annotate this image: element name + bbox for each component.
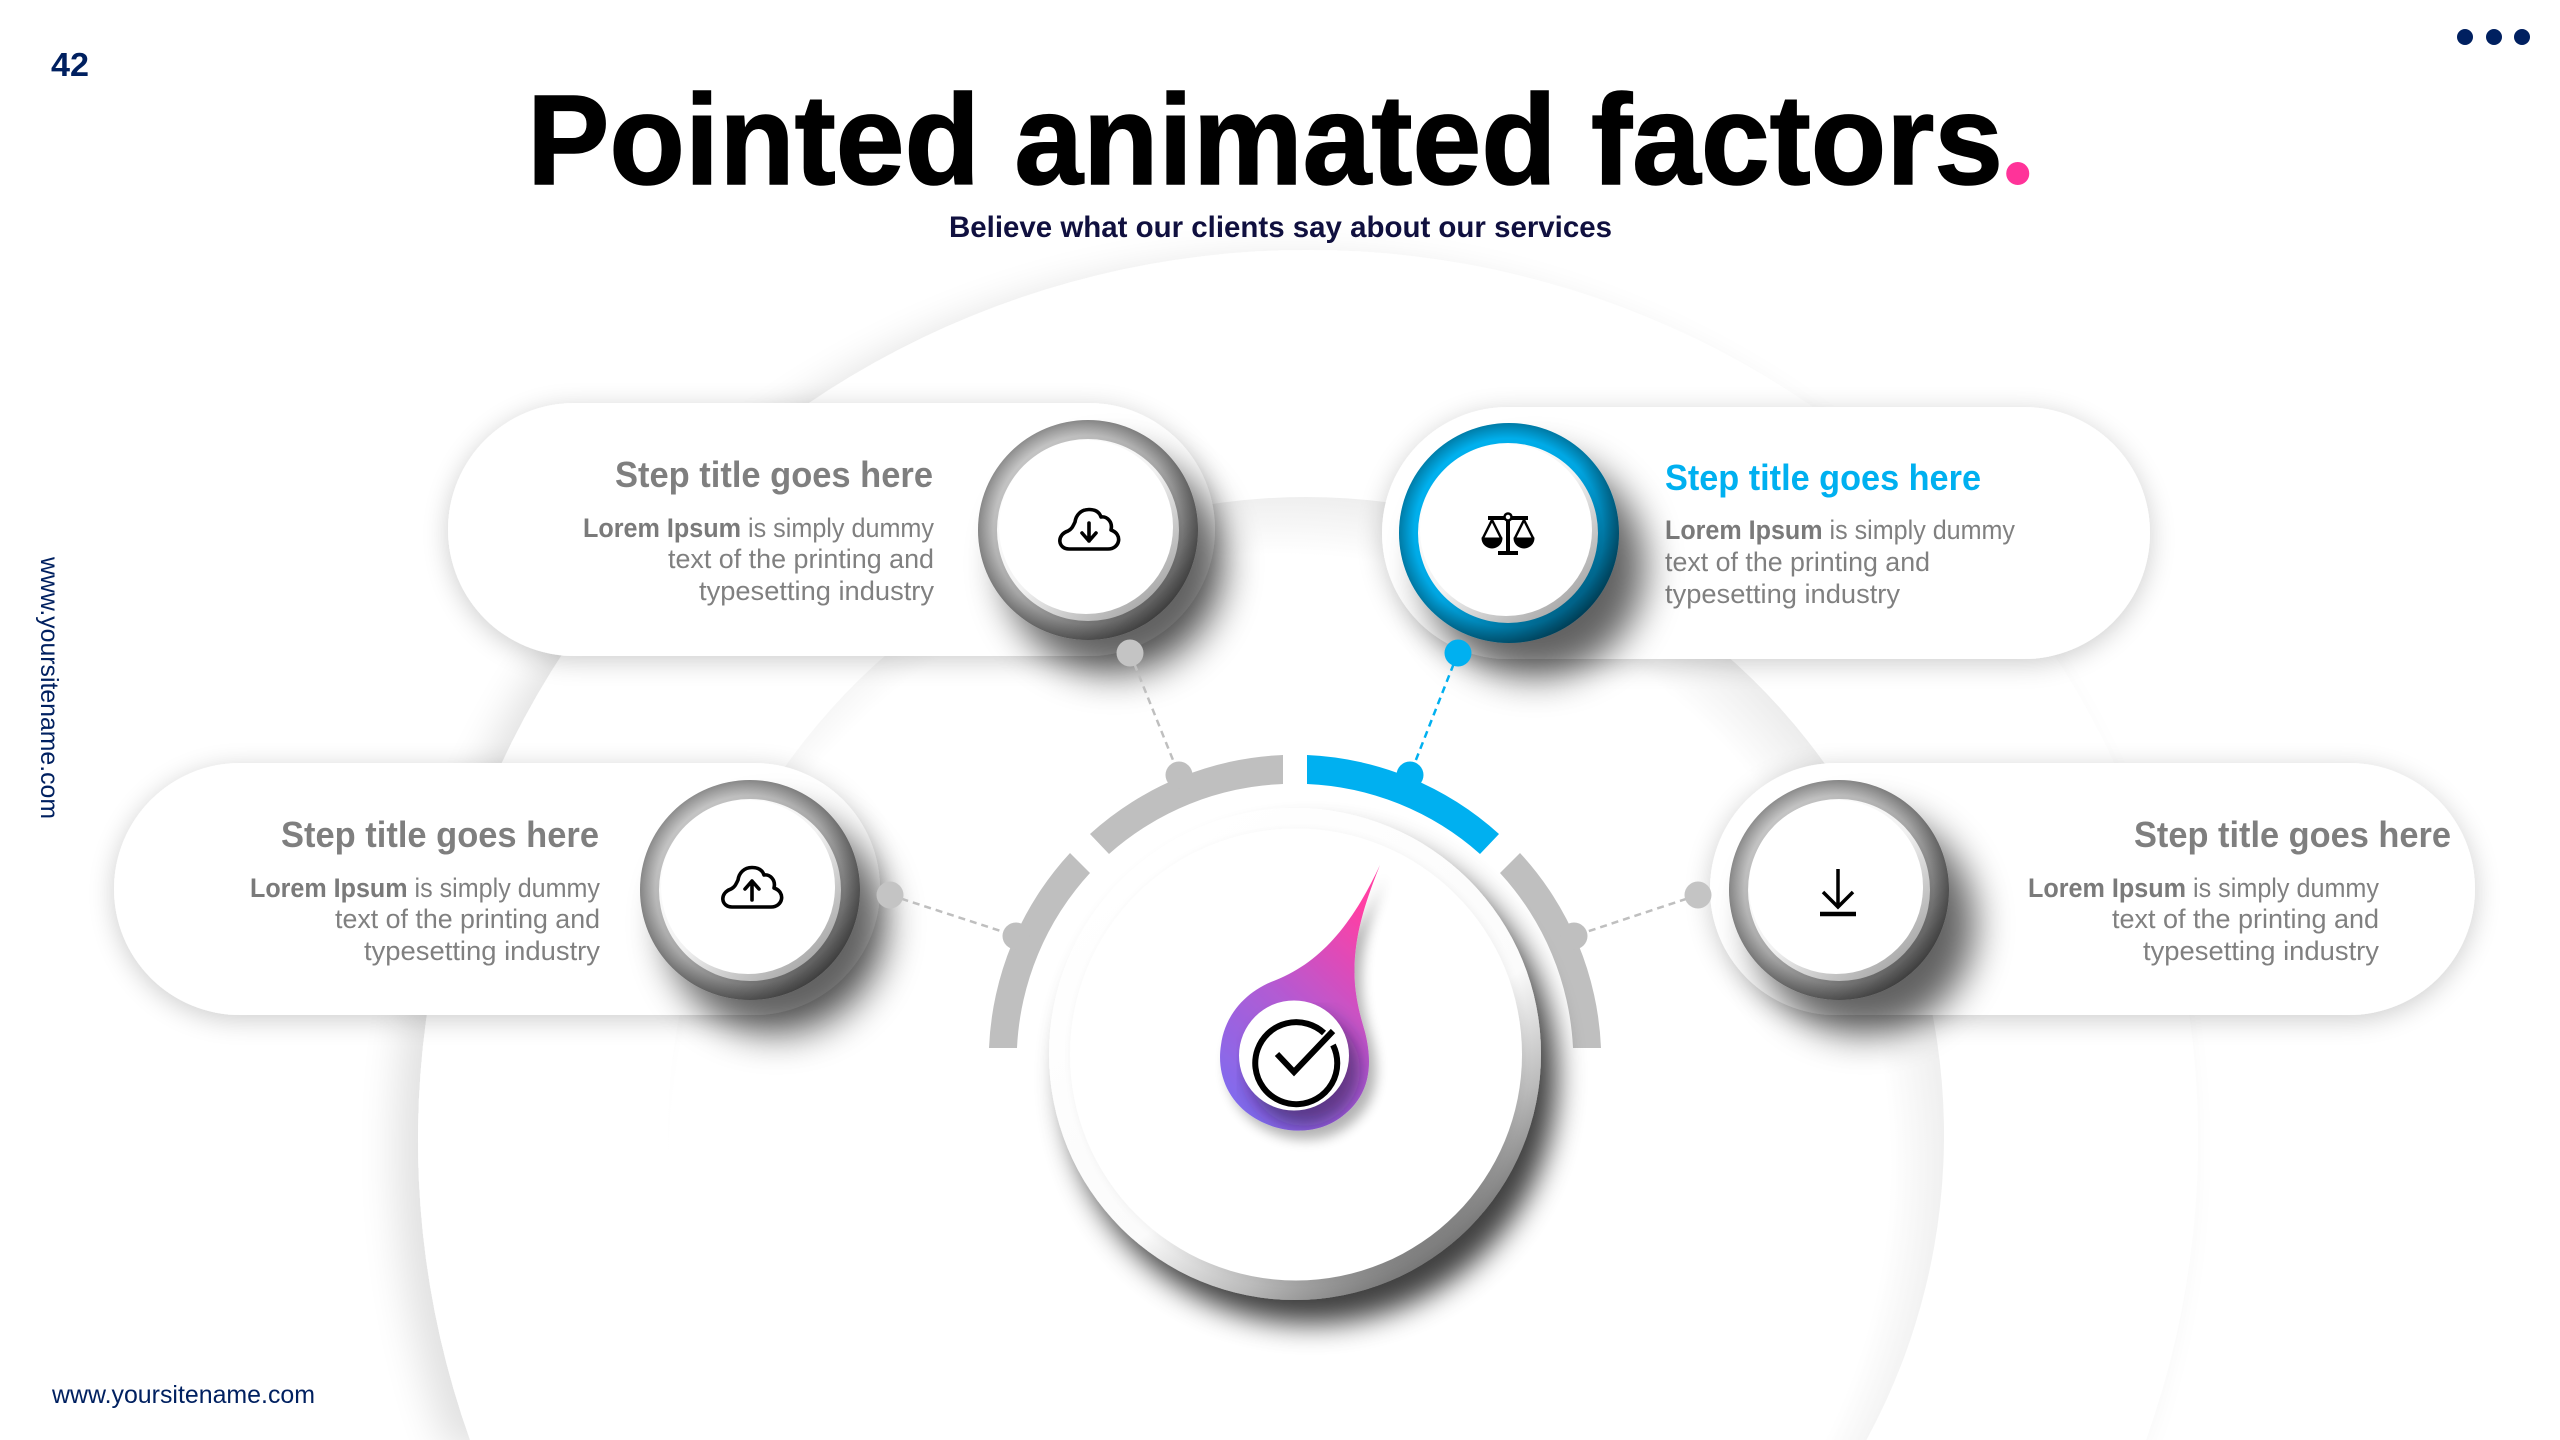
- step title: Step title goes here: [2134, 814, 2451, 855]
- step text: Lorem Ipsum is simply dummy: [583, 513, 934, 543]
- step text: typesetting industry: [1665, 579, 1901, 609]
- step title: Step title goes here: [1665, 457, 1981, 498]
- step text: text of the printing and: [2112, 904, 2379, 934]
- connector: left: [876, 882, 1016, 936]
- icon: download arrow: [1820, 869, 1856, 914]
- step text: Lorem Ipsum is simply dummy: [2028, 873, 2379, 903]
- title period: .: [2000, 56, 2036, 214]
- panel: step top-right: [1382, 407, 2150, 659]
- step title: Step title goes here: [615, 454, 933, 495]
- panel: step bottom-right: [1710, 763, 2475, 1015]
- step text: text of the printing and: [1665, 547, 1930, 577]
- icon: cloud download: [1060, 510, 1119, 549]
- ring: bottom-right: [1729, 780, 1949, 1000]
- icon: central teardrop with check: [1220, 865, 1380, 1131]
- icon: scales: [1482, 514, 1534, 553]
- background: outer disc: [418, 250, 2198, 1440]
- ring: top-right: [1399, 423, 1619, 643]
- side website text: www.yoursitename.com: [35, 556, 63, 819]
- panel: step bottom-left: [114, 763, 880, 1015]
- step text: typesetting industry: [2143, 936, 2380, 966]
- step text: typesetting industry: [364, 936, 601, 966]
- footer website text: www.yoursitename.com: [51, 1381, 315, 1409]
- gauge arcs: [989, 755, 1601, 1048]
- connector: top-left: [1116, 640, 1179, 775]
- central disc: [1049, 808, 1541, 1300]
- menu dots: [2457, 29, 2530, 45]
- title: Pointed animated factors: [527, 69, 2003, 212]
- step text: [1665, 515, 2015, 609]
- step text: typesetting industry: [699, 576, 935, 606]
- connector: top-right: [1410, 640, 1472, 775]
- step text: [2028, 873, 2380, 966]
- step text: [583, 513, 935, 606]
- connector: right: [1574, 882, 1712, 936]
- panel: step top-left: [448, 403, 1215, 656]
- icon: cloud upload: [723, 868, 782, 907]
- ring: bottom-left: [640, 780, 860, 1000]
- step text: Lorem Ipsum is simply dummy: [1665, 515, 2015, 545]
- step text: text of the printing and: [335, 904, 600, 934]
- background: inner disc: [668, 497, 1944, 1440]
- step title: Step title goes here: [281, 814, 599, 855]
- page number: 42: [51, 46, 89, 83]
- subtitle: Believe what our clients say about our services: [949, 211, 1612, 244]
- ring: top-left: [978, 420, 1198, 640]
- step text: text of the printing and: [668, 544, 934, 574]
- step text: Lorem Ipsum is simply dummy: [250, 873, 600, 903]
- step text: [250, 873, 601, 966]
